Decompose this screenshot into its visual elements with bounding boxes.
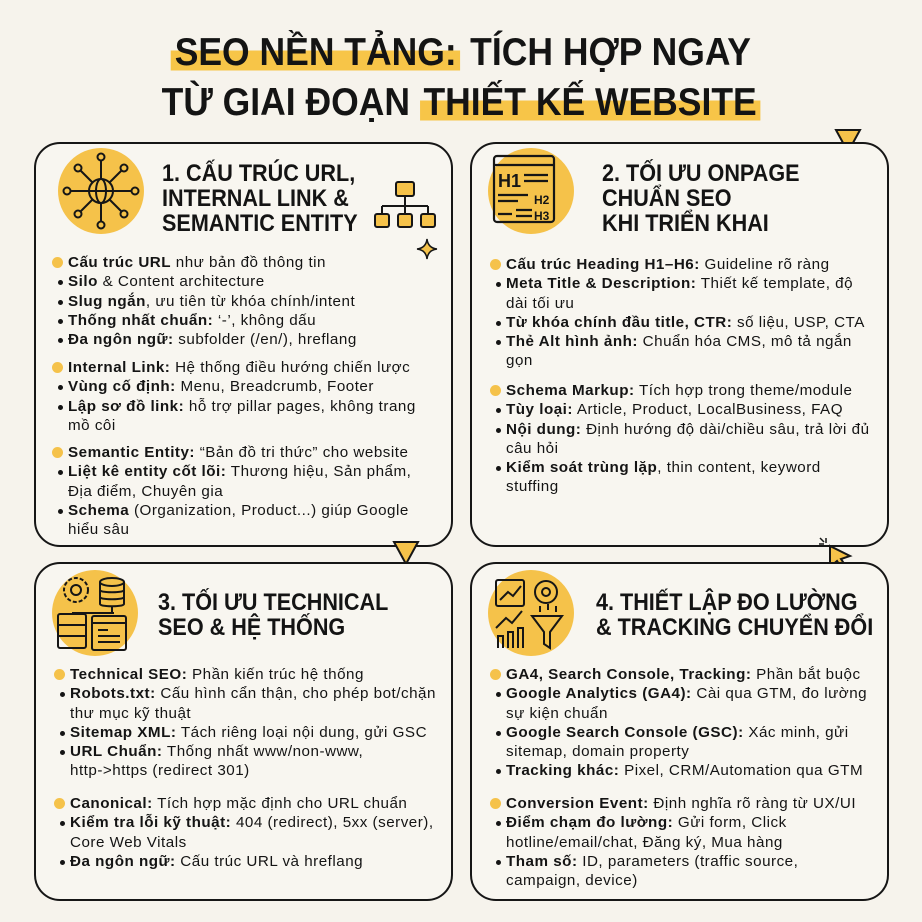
heading 4: 4. THIẾT LẬP ĐO LƯỜNG [596, 589, 858, 616]
text group: heading: dài tối ưu [506, 295, 574, 312]
text group: schema: Kiểm soát trùng lặp, thin content, keyword [506, 459, 821, 476]
icon: triangle middle [392, 541, 420, 562]
text group: heading: Thẻ Alt hình ảnh: Chuẩn hóa CMS, mô tả ngắn [506, 333, 852, 350]
text group: semantic entity: hiểu sâu [68, 521, 129, 538]
text group: ga4: sitemap, domain property [506, 743, 689, 760]
heading 2 [602, 159, 800, 237]
text group: url: Slug ngắn, ưu tiên từ khóa chính/intent [68, 293, 355, 310]
text group: technical: http->https (redirect 301) [70, 762, 250, 779]
heading 1: INTERNAL LINK & [162, 185, 349, 212]
text group: technical: URL Chuẩn: Thống nhất www/non-www, [70, 743, 363, 760]
text group: heading: Cấu trúc Heading H1–H6: Guideline rõ ràng [506, 256, 830, 273]
title: TỪ GIAI ĐOẠN THIẾT KẾ WEBSITE [162, 81, 757, 124]
heading 4: & TRACKING CHUYỂN ĐỔI [596, 614, 873, 641]
text group: technical: Robots.txt: Cấu hình cẩn thận, cho phép bot/chặn [70, 685, 436, 702]
heading 3 [158, 588, 388, 641]
icon: triangle top right [834, 129, 862, 142]
text group: heading [490, 256, 865, 369]
text group: internal link: Vùng cố định: Menu, Breadcrumb, Footer [68, 378, 374, 395]
title: SEO NỀN TẢNG: TÍCH HỢP NGAY [175, 31, 751, 74]
text group: url: Thống nhất chuẩn: ‘-’, không dấu [68, 312, 316, 329]
heading 2: CHUẨN SEO [602, 185, 732, 212]
heading 4 [596, 588, 873, 641]
panel: 4 tracking [470, 562, 889, 901]
text group: technical: Technical SEO: Phần kiến trúc hệ thống [70, 666, 364, 683]
text group: url: Cấu trúc URL như bản đồ thông tin [68, 254, 326, 271]
text group: canonical: Canonical: Tích hợp mặc định cho URL chuẩn [70, 795, 407, 812]
heading 1: SEMANTIC ENTITY [162, 210, 358, 237]
text group: url: Silo & Content architecture [68, 273, 265, 290]
text group: semantic entity [52, 444, 411, 538]
text group: semantic entity: Semantic Entity: “Bản đồ tri thức” cho website [68, 444, 408, 461]
text group: schema: stuffing [506, 478, 559, 495]
text group: schema: Schema Markup: Tích hợp trong theme/module [506, 382, 852, 399]
text group: conversion: Tham số: ID, parameters (traffic source, [506, 853, 798, 870]
text group: technical: thư mục kỹ thuật [70, 705, 191, 722]
text group: semantic entity: Địa điểm, Chuyên gia [68, 483, 223, 500]
text group: internal link: mồ côi [68, 417, 116, 434]
text group: canonical [54, 795, 434, 870]
heading 3: SEO & HỆ THỐNG [158, 614, 345, 641]
text group: ga4: Google Search Console (GSC): Xác minh, gửi [506, 724, 849, 741]
title [162, 30, 760, 124]
text group: canonical: Đa ngôn ngữ: Cấu trúc URL và hreflang [70, 853, 363, 870]
text group: semantic entity: Liệt kê entity cốt lõi: Thương hiệu, Sản phẩm, [68, 463, 411, 480]
text group: schema: câu hỏi [506, 440, 558, 457]
text group: url: Đa ngôn ngữ: subfolder (/en/), hreflang [68, 331, 357, 348]
text group: conversion: Conversion Event: Định nghĩa rõ ràng từ UX/UI [506, 795, 856, 812]
heading 2: 2. TỐI ƯU ONPAGE [602, 160, 800, 187]
icon: sitemap [374, 181, 436, 228]
text group: internal link: Internal Link: Hệ thống điều hướng chiến lược [68, 359, 410, 376]
text group: schema: Nội dung: Định hướng độ dài/chiều sâu, trả lời đủ [506, 421, 870, 438]
text group: schema: Tùy loại: Article, Product, LocalBusiness, FAQ [506, 401, 843, 418]
text group: internal link: Lập sơ đồ link: hỗ trợ pillar pages, không trang [68, 398, 416, 415]
text group: semantic entity: Schema (Organization, Product...) giúp Google [68, 502, 409, 519]
panel: 2 onpage [470, 142, 889, 547]
text group: heading: Meta Title & Description: Thiết kế template, độ [506, 275, 853, 292]
icon: gear database [52, 570, 138, 656]
text group: technical [54, 666, 436, 779]
icon: heading doc [488, 148, 574, 234]
text group: url [52, 254, 357, 348]
text group: conversion: hotline/email/chat, Đăng ký, Mua hàng [506, 834, 783, 851]
heading 1 [162, 159, 358, 237]
text group: ga4: GA4, Search Console, Tracking: Phần bắt buộc [506, 666, 861, 683]
text group: internal link [52, 359, 416, 434]
text group: schema [490, 382, 870, 495]
panel: 1 url structure [34, 142, 453, 547]
text group: conversion: campaign, device) [506, 872, 638, 889]
text group: ga4 [490, 666, 867, 779]
heading 2: KHI TRIỂN KHAI [602, 210, 769, 237]
icon: sparkle [416, 238, 438, 260]
icon: analytics funnel [488, 570, 574, 656]
text group: heading: gọn [506, 352, 533, 369]
text group: technical: Sitemap XML: Tách riêng loại nội dung, gửi GSC [70, 724, 427, 741]
heading 1: 1. CẤU TRÚC URL, [162, 160, 355, 187]
heading 3: 3. TỐI ƯU TECHNICAL [158, 589, 388, 616]
icon: heading doc: H3 [534, 209, 550, 223]
panel: 3 technical [34, 562, 453, 901]
text group: ga4: sự kiện chuẩn [506, 705, 608, 722]
text group: canonical: Kiểm tra lỗi kỹ thuật: 404 (redirect), 5xx (server), [70, 814, 434, 831]
text group: conversion: Điểm chạm đo lường: Gửi form, Click [506, 814, 787, 831]
text group: ga4: Tracking khác: Pixel, CRM/Automation qua GTM [506, 762, 863, 779]
text group: conversion [490, 795, 856, 889]
icon: cursor [819, 538, 852, 562]
icon: heading doc: H1 [498, 171, 521, 191]
text group: canonical: Core Web Vitals [70, 834, 187, 851]
icon: globe network [58, 148, 144, 234]
icon: heading doc: H2 [534, 193, 550, 207]
text group: heading: Từ khóa chính đầu title, CTR: số liệu, USP, CTA [506, 314, 865, 331]
text group: ga4: Google Analytics (GA4): Cài qua GTM, đo lường [506, 685, 867, 702]
